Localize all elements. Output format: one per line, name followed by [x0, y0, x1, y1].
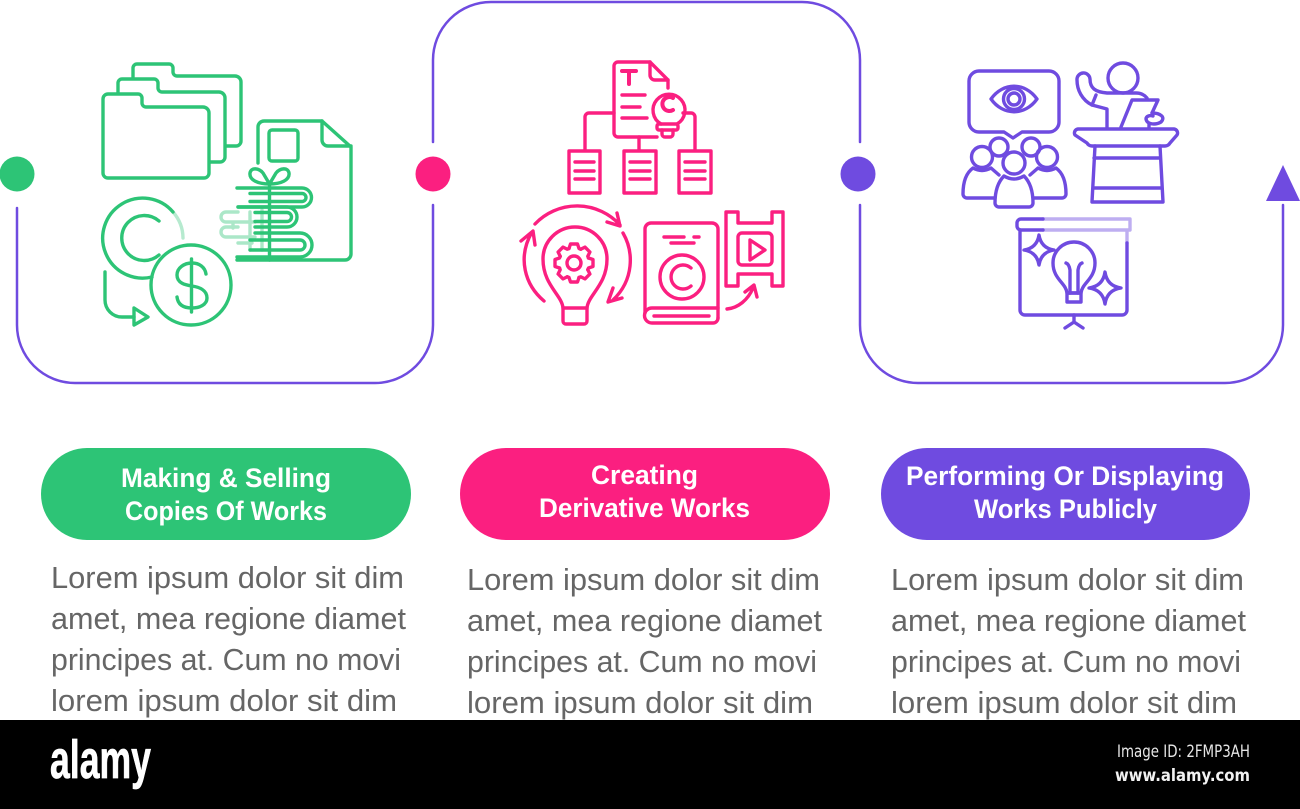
icon: derivative document tree, idea bulb, book and film: [521, 62, 783, 324]
body text: column three: amet, mea regione diamet: [891, 603, 1246, 638]
arrow: timeline end: [1266, 165, 1300, 201]
image id: Image ID: 2FMP3AH: [1117, 742, 1250, 762]
heading: making and selling: Copies Of Works: [125, 496, 327, 526]
body text: column one: principes at. Cum no movi: [51, 642, 401, 677]
logo: alamy: alamy: [50, 730, 151, 790]
body text: column one: amet, mea regione diamet: [51, 601, 406, 636]
panel: making and selling copies: [41, 448, 411, 718]
marker: purple dot: [840, 156, 876, 192]
body text: column two: lorem ipsum dolor sit dim: [467, 685, 813, 720]
body text: column three: Lorem ipsum dolor sit dim: [891, 562, 1244, 597]
body text: column two: amet, mea regione diamet: [467, 603, 822, 638]
body text: column three: lorem ipsum dolor sit dim: [891, 685, 1237, 720]
heading: creating derivative works: Creating: [591, 460, 698, 490]
heading: performing or displaying: Works Publicly: [974, 494, 1157, 524]
heading: performing or displaying: Performing Or Displaying: [906, 461, 1224, 491]
panel: performing or displaying publicly: [881, 448, 1250, 720]
heading: creating derivative works: Derivative Works: [539, 493, 750, 523]
body text: column three: principes at. Cum no movi: [891, 644, 1241, 679]
website: www.alamy.com: [1115, 766, 1250, 786]
heading: making and selling: Making & Selling: [121, 463, 331, 493]
icon: folders, document, gift books, copyright and dollar: [103, 64, 351, 325]
body text: column two: Lorem ipsum dolor sit dim: [467, 562, 820, 597]
marker: green dot: [0, 156, 34, 192]
heading pill: pink: [460, 448, 830, 540]
heading pill: green: [41, 448, 411, 540]
body text: column one: Lorem ipsum dolor sit dim: [51, 560, 404, 595]
marker: pink dot: [416, 156, 450, 192]
timeline frame line: [17, 2, 1283, 383]
body text: column one: lorem ipsum dolor sit dim: [51, 683, 397, 718]
icon: speaker, audience, eye and presentation board: [963, 63, 1178, 328]
panel: creating derivative works: [460, 448, 830, 720]
heading pill: purple: [881, 448, 1250, 540]
footer bar: [0, 720, 1300, 809]
body text: column two: principes at. Cum no movi: [467, 644, 817, 679]
